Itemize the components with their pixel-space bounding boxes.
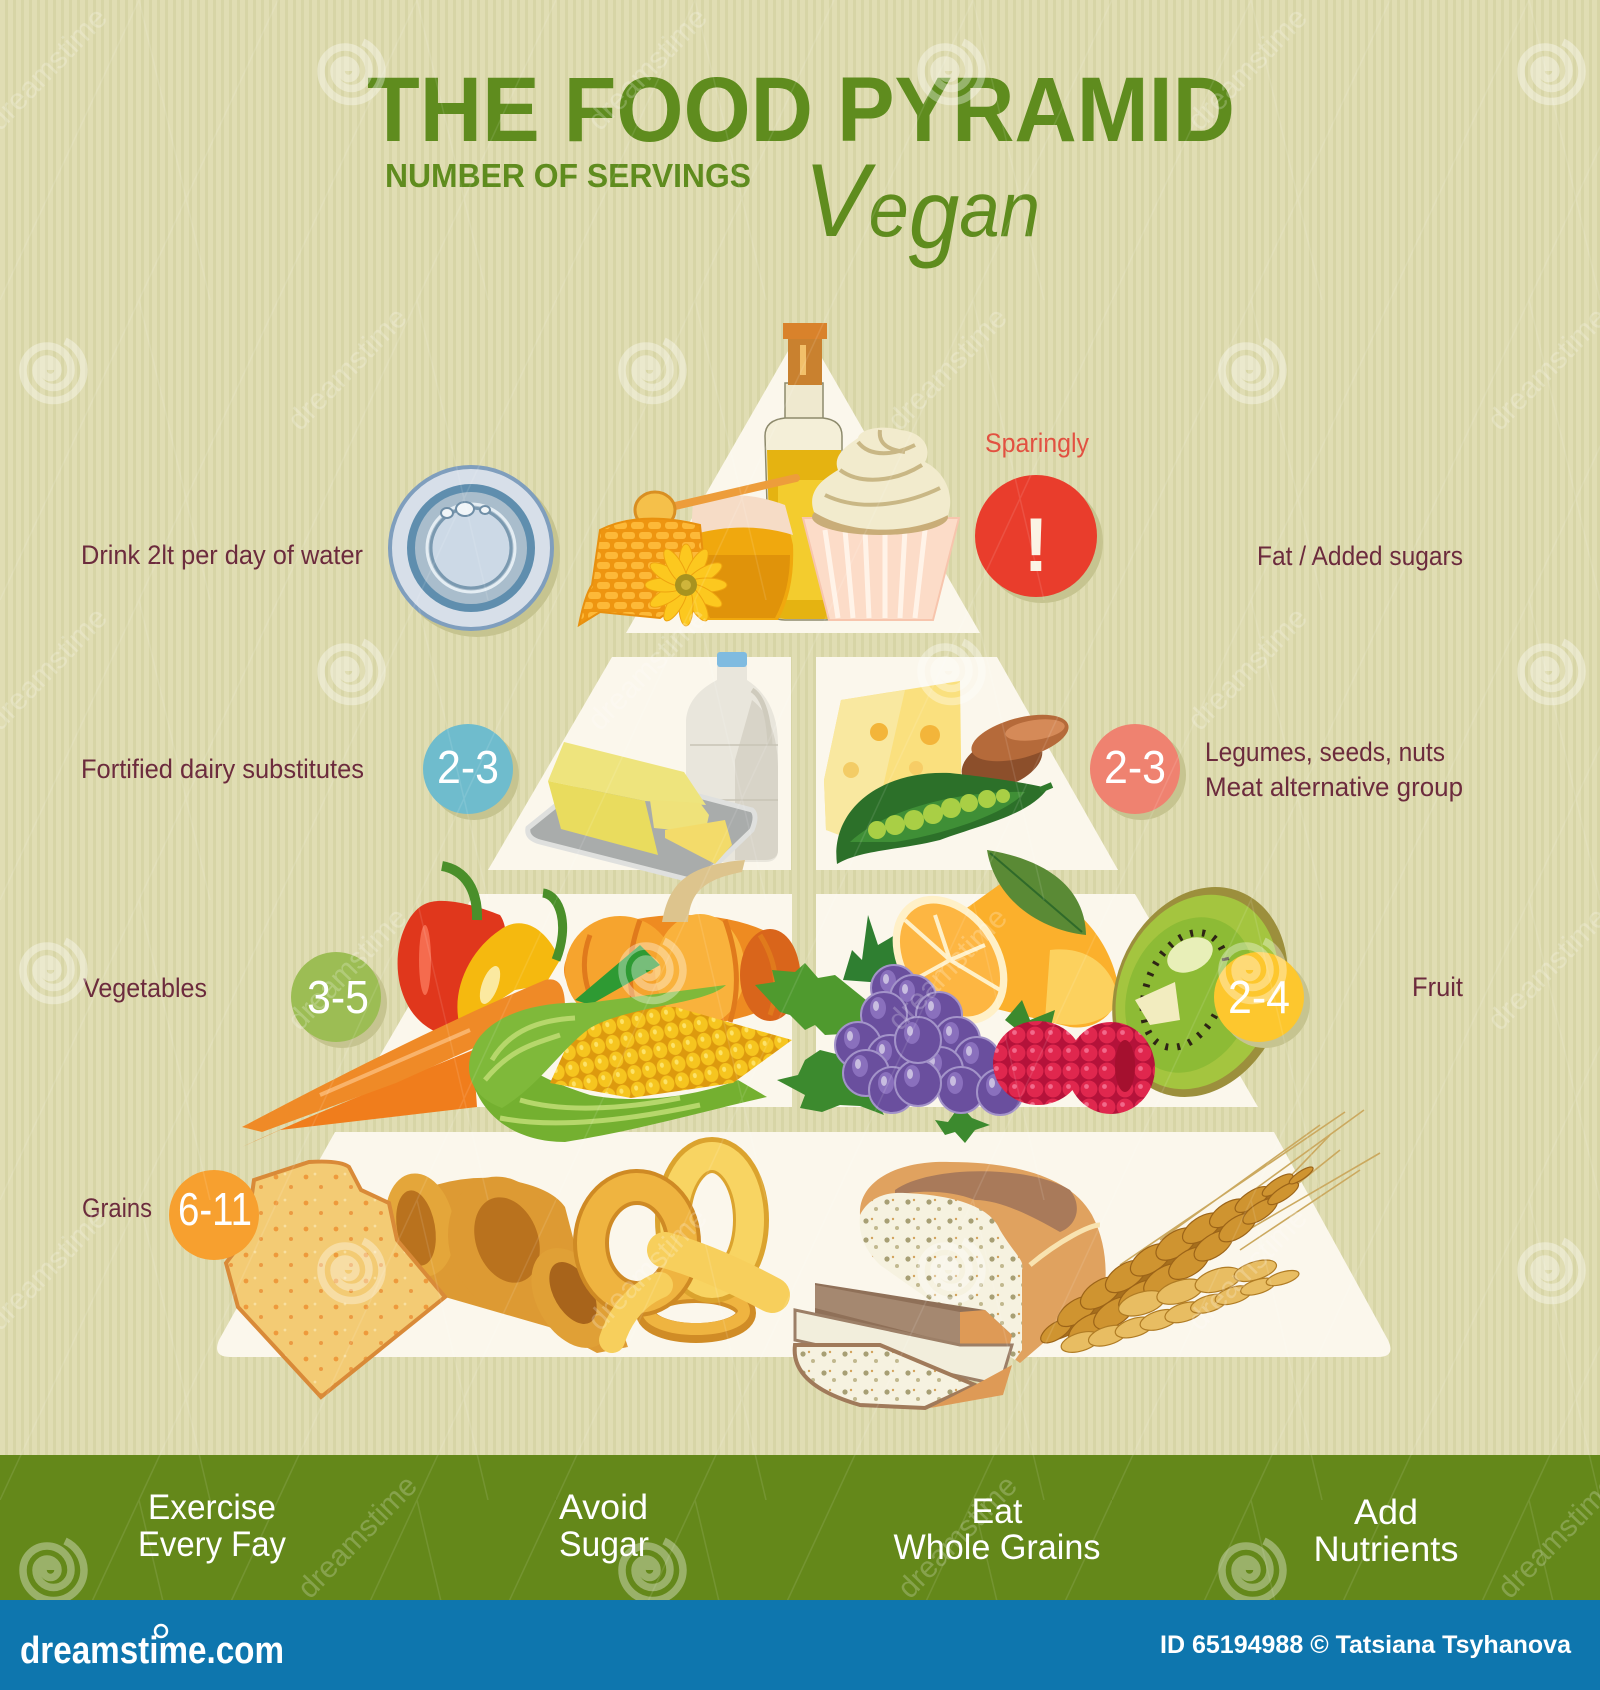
serving badge: grains 6-11 bbox=[169, 1170, 259, 1260]
title: THE FOOD PYRAMID bbox=[367, 59, 1235, 161]
tier: fats and sugars bbox=[626, 325, 980, 633]
watermark overlay: dreamstime bbox=[581, 1, 714, 137]
food: pea pod bbox=[836, 773, 1052, 864]
food: flower bbox=[645, 544, 727, 626]
food: orange and slice bbox=[869, 874, 1119, 1046]
tier: fruit bbox=[816, 894, 1258, 1107]
food: pretzel bbox=[591, 1155, 772, 1340]
food: bread loaf bbox=[860, 1162, 1106, 1363]
wheat ear upper bbox=[1031, 1147, 1326, 1365]
wheat ear lower bbox=[1053, 1246, 1303, 1358]
watermark overlay: dreamstime bbox=[281, 901, 414, 1037]
subtitle: number of servings: NUMBER OF SERVINGS bbox=[385, 157, 751, 194]
tip: exercise: Exercise bbox=[148, 1488, 276, 1527]
icon: water plate bbox=[390, 467, 560, 637]
tip: whole grains bbox=[894, 1492, 1100, 1567]
food: carrots bbox=[242, 979, 565, 1147]
watermark overlay: dreamstime bbox=[1181, 1, 1314, 137]
subtitle: vegan: Ve bbox=[804, 143, 912, 259]
tier: vegetables bbox=[350, 894, 792, 1107]
watermark overlay: dreamstime bbox=[891, 1469, 1024, 1605]
label: sparingly: Sparingly bbox=[985, 428, 1089, 458]
food: cheese bbox=[824, 681, 962, 845]
watermark overlay: dreamstime bbox=[581, 1201, 714, 1337]
label: fruit: Fruit bbox=[1412, 972, 1463, 1002]
tip: sugar bbox=[559, 1488, 649, 1564]
tier: dairy substitutes bbox=[488, 657, 791, 870]
tip: exercise bbox=[138, 1488, 286, 1564]
tip: exercise: Every Fay bbox=[138, 1525, 286, 1564]
food: grapes bbox=[835, 965, 1023, 1115]
label: fat and sugars: Fat / Added sugars bbox=[1257, 541, 1463, 571]
subtitle: vegan: g bbox=[909, 159, 959, 269]
serving badge: vegetables 3-5 bbox=[291, 952, 387, 1048]
exclamation mark: ! bbox=[1023, 503, 1049, 588]
food: yellow pepper bbox=[457, 893, 563, 1027]
watermark overlay: dreamstime bbox=[281, 301, 414, 437]
food: green onion leaves bbox=[575, 945, 660, 1005]
food: butter bbox=[528, 742, 755, 880]
tip: whole grains: Whole Grains bbox=[894, 1528, 1100, 1567]
watermark overlay: dreamstime bbox=[1181, 1201, 1314, 1337]
credit band bbox=[0, 1600, 1600, 1690]
credit logo: dreamstime.com bbox=[20, 1630, 284, 1672]
food: oil bottle bbox=[765, 323, 842, 620]
pyramid bbox=[217, 325, 1390, 1357]
food: honeycomb bbox=[579, 519, 706, 625]
food: orange leaf bbox=[987, 850, 1086, 935]
tip: nutrients: Nutrients bbox=[1314, 1530, 1458, 1569]
food: toast bbox=[226, 1162, 445, 1397]
food: raspberries bbox=[993, 1000, 1155, 1114]
tier: legumes bbox=[816, 657, 1118, 870]
tip: nutrients: Add bbox=[1354, 1493, 1418, 1532]
credit logo mark bbox=[155, 1625, 167, 1637]
tip: sugar: Sugar bbox=[559, 1525, 649, 1564]
watermark overlay: dreamstime bbox=[881, 901, 1014, 1037]
label: vegetables: Vegetables bbox=[83, 973, 207, 1003]
icon: sparingly alert bbox=[975, 475, 1103, 603]
label: grains: Grains bbox=[82, 1193, 152, 1223]
label: legumes: Legumes, seeds, nuts bbox=[1205, 737, 1445, 767]
serving badge: fruit 2-4: 2-4 bbox=[1228, 971, 1290, 1023]
tip: nutrients bbox=[1314, 1493, 1458, 1569]
watermark overlay: dreamstime bbox=[581, 601, 714, 737]
food: wheat bbox=[1031, 1110, 1380, 1365]
serving badge: legumes 2-3 bbox=[1090, 724, 1186, 820]
food: grape leaves bbox=[755, 915, 990, 1143]
tip: whole grains: Eat bbox=[972, 1492, 1023, 1531]
subtitle: vegan: an bbox=[959, 165, 1040, 253]
food: kiwi bbox=[1082, 860, 1318, 1124]
serving badge: dairy 2-3 bbox=[423, 724, 519, 820]
serving badge: legumes 2-3: 2-3 bbox=[1104, 741, 1166, 793]
food: red pepper bbox=[398, 866, 505, 1037]
tier: grains bbox=[217, 1132, 1390, 1357]
label: dairy: Fortified dairy substitutes bbox=[81, 754, 364, 784]
watermark overlay: dreamstime bbox=[291, 1469, 424, 1605]
food: croissant bbox=[370, 1160, 629, 1362]
tip: sugar: Avoid bbox=[559, 1488, 648, 1527]
serving badge: grains 6-11: 6-11 bbox=[178, 1183, 252, 1235]
serving badge: vegetables 3-5: 3-5 bbox=[307, 971, 369, 1023]
watermark overlay: dreamstime bbox=[1181, 601, 1314, 737]
food: bread slices bbox=[795, 1283, 1012, 1408]
food: corn bbox=[469, 985, 792, 1142]
food: cupcake bbox=[803, 428, 959, 620]
watermark overlay: dreamstime bbox=[881, 301, 1014, 437]
food: nuts bbox=[954, 706, 1073, 799]
food: milk jug bbox=[686, 652, 778, 862]
credit id: ID 65194988 © Tatsiana Tsyhanova bbox=[1160, 1631, 1572, 1659]
tips band bbox=[0, 1455, 1600, 1600]
label: meat alternative: Meat alternative group bbox=[1205, 772, 1463, 802]
serving badge: fruit 2-4 bbox=[1214, 952, 1310, 1048]
serving badge: dairy 2-3: 2-3 bbox=[437, 741, 499, 793]
food: pumpkin bbox=[564, 860, 800, 1026]
label: water: Drink 2lt per day of water bbox=[81, 540, 363, 570]
food: honey jar with dipper bbox=[635, 478, 796, 620]
